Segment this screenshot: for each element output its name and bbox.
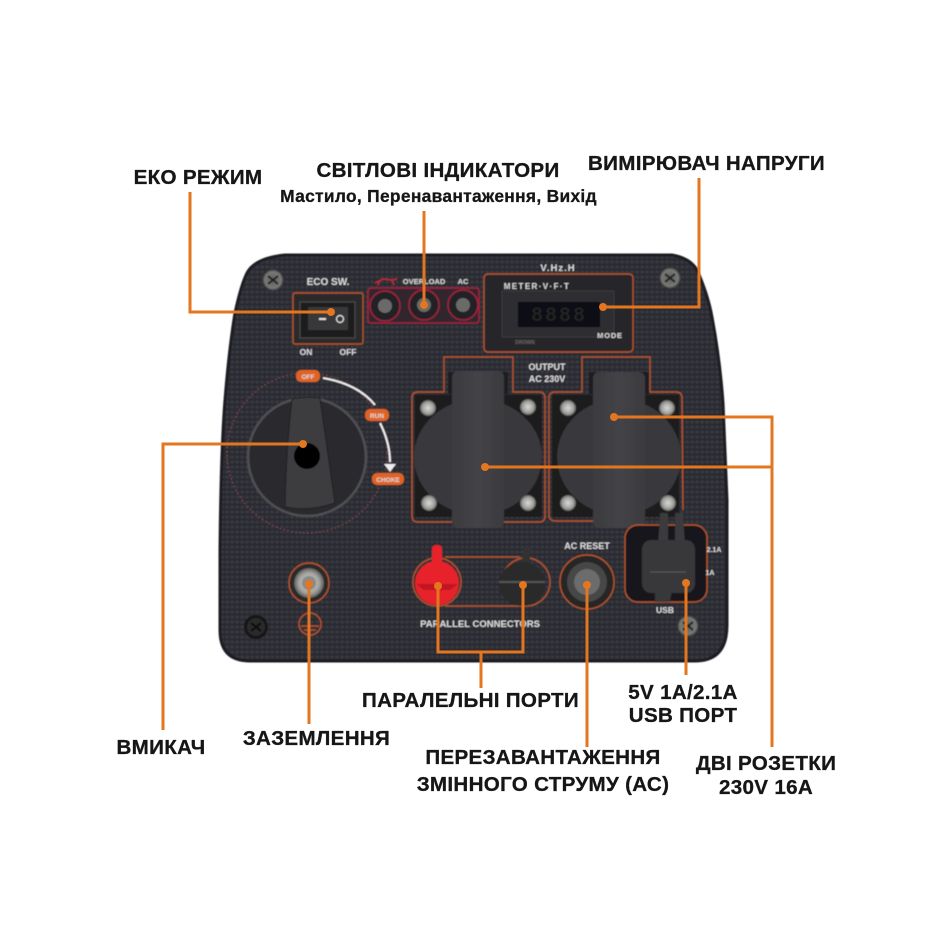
leader line: indicators bbox=[420, 211, 428, 309]
heading: USB port: USB ПОРТ bbox=[629, 704, 737, 727]
heading: light indicators: СВІТЛОВІ ІНДИКАТОРИ bbox=[316, 159, 560, 182]
heading: parallel ports: ПАРАЛЕЛЬНІ ПОРТИ bbox=[362, 689, 579, 712]
USB port bbox=[625, 513, 721, 615]
leader line: voltage meter bbox=[599, 178, 699, 311]
light indicators: AC bbox=[458, 277, 469, 286]
eco switch bbox=[293, 277, 363, 357]
engine switch dial: OFF bbox=[302, 374, 315, 381]
voltage meter: METER·V·F·T bbox=[504, 282, 570, 291]
eco switch: ON bbox=[300, 347, 312, 357]
voltage meter bbox=[484, 263, 633, 352]
leader line: outlets bbox=[481, 413, 772, 747]
engine switch dial bbox=[227, 370, 404, 533]
USB port: 2.1A bbox=[707, 547, 721, 554]
heading: two outlets: 230V 16A bbox=[719, 776, 813, 799]
engine switch dial: RUN bbox=[370, 413, 384, 420]
leader line: AC reset bbox=[583, 581, 591, 747]
text: indicators subtitle: Мастило, Перенавантаження, Вихід bbox=[280, 186, 597, 206]
leader line: USB bbox=[682, 579, 690, 675]
AC reset button: AC RESET bbox=[564, 541, 610, 551]
heading: switch: ВМИКАЧ bbox=[117, 736, 205, 759]
leader line: engine switch bbox=[163, 440, 307, 730]
outlet: right bbox=[557, 372, 681, 528]
engine switch dial: CHOKE bbox=[376, 477, 400, 484]
output label bbox=[528, 362, 566, 384]
voltage meter: V.Hz.H bbox=[540, 263, 576, 274]
eco switch: OFF bbox=[340, 347, 356, 357]
leader line: ground bbox=[305, 580, 313, 724]
heading: voltage meter: ВИМІРЮВАЧ НАПРУГИ bbox=[588, 152, 825, 175]
voltage meter: 8888 bbox=[531, 305, 587, 328]
heading: two outlets: ДВІ РОЗЕТКИ bbox=[696, 752, 836, 775]
AC reset button bbox=[560, 541, 614, 609]
ground terminal bbox=[289, 563, 329, 635]
heading: AC reset: ЗМІННОГО СТРУМУ (АС) bbox=[417, 773, 669, 796]
USB port: 1A bbox=[706, 570, 714, 577]
outlet: left bbox=[414, 371, 542, 528]
heading: AC reset: ПЕРЕЗАВАНТАЖЕННЯ bbox=[425, 746, 661, 769]
outlet frames bbox=[412, 357, 683, 522]
USB port: USB bbox=[656, 605, 674, 615]
light indicators bbox=[368, 277, 479, 323]
heading: USB port: 5V 1A/2.1A bbox=[628, 681, 738, 704]
panel: generator control panel bbox=[220, 255, 727, 661]
leader line: parallel ports bbox=[434, 581, 527, 688]
heading: eco mode: ЕКО РЕЖИМ bbox=[134, 166, 262, 189]
leader line: eco mode bbox=[190, 192, 335, 316]
heading: ground: ЗАЗЕМЛЕННЯ bbox=[243, 727, 390, 750]
light indicators: OVERLOAD bbox=[403, 277, 446, 286]
output label: AC 230V bbox=[529, 374, 565, 384]
parallel connectors bbox=[413, 545, 550, 630]
output label: OUTPUT bbox=[528, 362, 566, 372]
voltage meter: MODE bbox=[597, 331, 623, 340]
eco switch: ECO SW. bbox=[307, 277, 350, 288]
icon: panel screws bbox=[244, 267, 699, 639]
voltage meter: DROWN bbox=[515, 340, 535, 346]
parallel connectors: PARALLEL CONNECTORS bbox=[420, 619, 540, 630]
